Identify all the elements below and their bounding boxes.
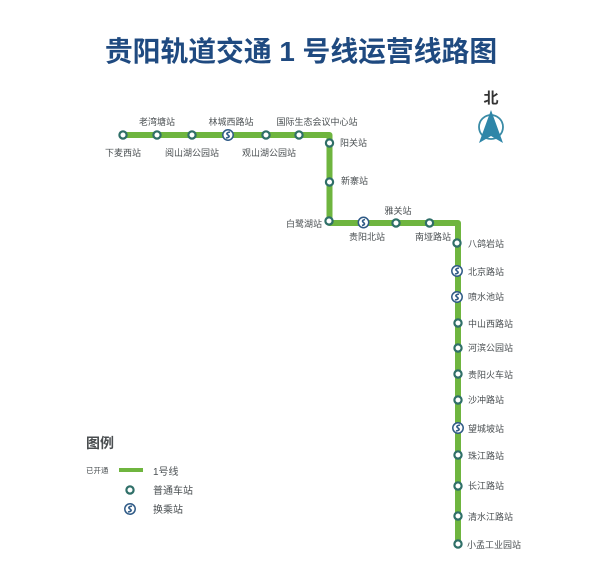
legend (86, 435, 193, 516)
station: 新寨站 (326, 175, 368, 186)
station: 贵阳火车站 (454, 369, 513, 380)
station: 阅山湖公园站 (165, 131, 219, 158)
station: 雅关站: 雅关站 (384, 205, 412, 216)
station: 北京路站 (452, 266, 504, 277)
station: 北京路站: 北京路站 (468, 266, 504, 277)
station: 沙冲路站: 沙冲路站 (468, 394, 504, 405)
station: 林城西路站: 林城西路站 (208, 116, 254, 127)
stations (105, 116, 521, 550)
station: 观山湖公园站: 观山湖公园站 (242, 147, 296, 158)
station: 河滨公园站: 河滨公园站 (468, 342, 513, 353)
station: 老湾塘站: 老湾塘站 (139, 116, 175, 127)
title: 贵阳轨道交通 1 号线运营线路图 (105, 36, 497, 67)
station: 南垭路站: 南垭路站 (415, 231, 451, 242)
legend: regular station: 普通车站 (153, 484, 193, 497)
legend: interchange station: 换乘站 (153, 503, 183, 516)
legend: line 1: 1号线 (153, 465, 179, 478)
station: 珠江路站: 珠江路站 (468, 450, 504, 461)
station: 长江路站: 长江路站 (468, 480, 504, 491)
station: 白鹭湖站: 白鹭湖站 (286, 218, 322, 229)
station: 沙冲路站 (454, 394, 504, 405)
station: 林城西路站 (208, 116, 254, 140)
station: 国际生态会议中心站 (276, 116, 358, 139)
icon: north compass: 北 (483, 90, 499, 107)
station: 望城坡站 (453, 423, 504, 434)
station: 雅关站 (384, 205, 412, 227)
station: 下麦西站: 下麦西站 (105, 147, 141, 158)
icon: north compass (479, 90, 503, 143)
legend: line 1: 已开通 (86, 465, 109, 475)
station: 八鸽岩站: 八鸽岩站 (468, 238, 504, 249)
station: 喷水池站 (452, 291, 504, 302)
station: 小孟工业园站: 小孟工业园站 (467, 539, 521, 550)
station: 观山湖公园站 (242, 131, 296, 158)
legend heading: 图例 (86, 435, 114, 451)
station: 中山西路站: 中山西路站 (468, 318, 513, 329)
station: 长江路站 (454, 480, 504, 491)
station: 清水江路站: 清水江路站 (468, 511, 513, 522)
station: 贵阳火车站: 贵阳火车站 (468, 369, 513, 380)
station: 阳关站: 阳关站 (340, 137, 367, 148)
station: 中山西路站 (454, 318, 513, 329)
station: 国际生态会议中心站: 国际生态会议中心站 (276, 116, 358, 127)
station: 清水江路站 (454, 511, 513, 522)
station: 老湾塘站 (139, 116, 175, 139)
station: 新寨站: 新寨站 (341, 175, 368, 186)
station: 八鸽岩站 (453, 238, 504, 249)
station: 河滨公园站 (454, 342, 513, 353)
station: 贵阳北站 (349, 217, 385, 242)
station: 南垭路站 (415, 219, 451, 242)
station: 望城坡站: 望城坡站 (468, 423, 504, 434)
station: 喷水池站: 喷水池站 (468, 291, 504, 302)
station: 珠江路站 (454, 450, 504, 461)
station: 下麦西站 (105, 131, 141, 158)
legend: line 1 (86, 465, 179, 478)
station: 阳关站 (326, 137, 367, 148)
metro line 1 (123, 135, 458, 545)
station: 贵阳北站: 贵阳北站 (349, 231, 385, 242)
station: 阅山湖公园站: 阅山湖公园站 (165, 147, 219, 158)
station: 白鹭湖站 (286, 217, 333, 229)
